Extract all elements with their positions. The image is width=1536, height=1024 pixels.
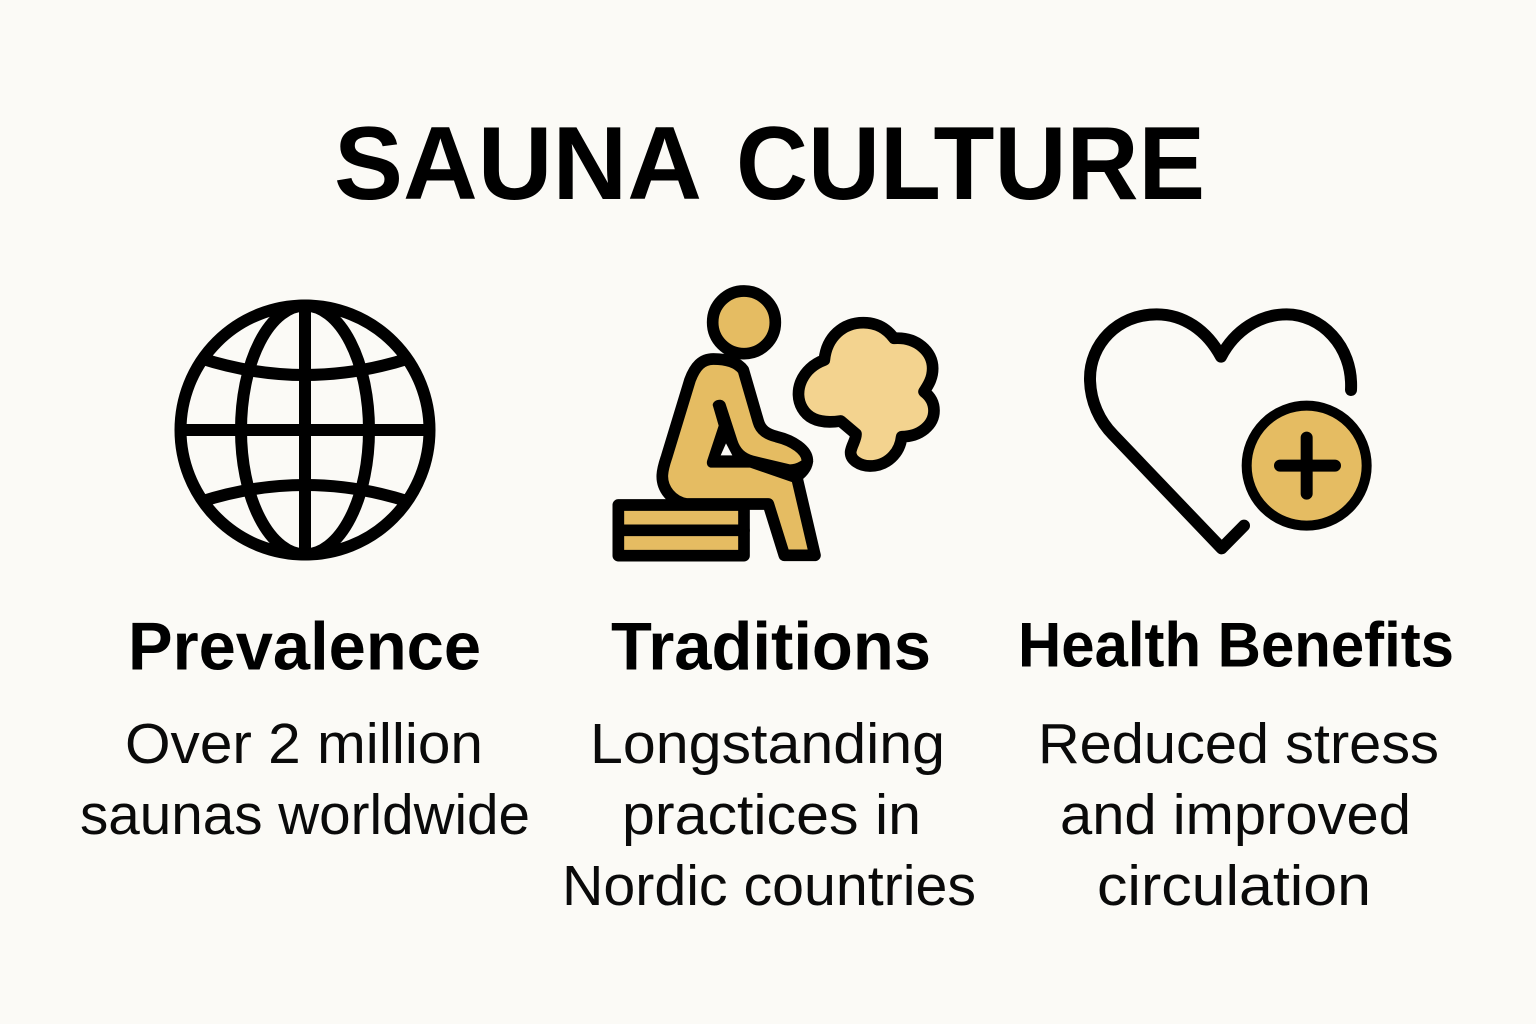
text: traditions description [562,712,976,918]
icon: globe [180,305,430,555]
text: prevalence description [80,712,530,847]
arm and leg outline [707,400,813,482]
heading: prevalence: Prevalence [128,608,481,684]
panel: traditions [562,291,976,918]
title: CULTURE [736,106,1205,222]
heart outline [1090,314,1351,548]
text: health benefits description: and improved [1060,783,1411,847]
text: prevalence description: Over 2 million [125,712,483,776]
icon: person sitting in sauna with steam [618,291,934,556]
heading: traditions: Traditions [611,608,931,684]
person body [662,359,815,555]
title [334,106,1205,222]
panel: health benefits [1018,314,1454,918]
text: traditions description: Longstanding [590,712,945,776]
steam cloud [798,323,934,466]
person head [713,291,775,354]
text: prevalence description: saunas worldwide [80,783,530,847]
text: health benefits description: circulation [1097,854,1371,918]
heading: health benefits: Health Benefits [1018,610,1454,680]
title: SAUNA [334,106,702,222]
text: traditions description: Nordic countries [562,854,976,918]
gap between arm and body [721,443,732,455]
text: traditions description: practices in [622,783,921,847]
icon: heart with plus [1090,314,1367,548]
text: health benefits description [1038,712,1439,918]
plus badge [1247,406,1367,526]
text: health benefits description: Reduced stress [1038,712,1439,776]
bench [618,505,744,556]
panel: prevalence [80,305,530,847]
